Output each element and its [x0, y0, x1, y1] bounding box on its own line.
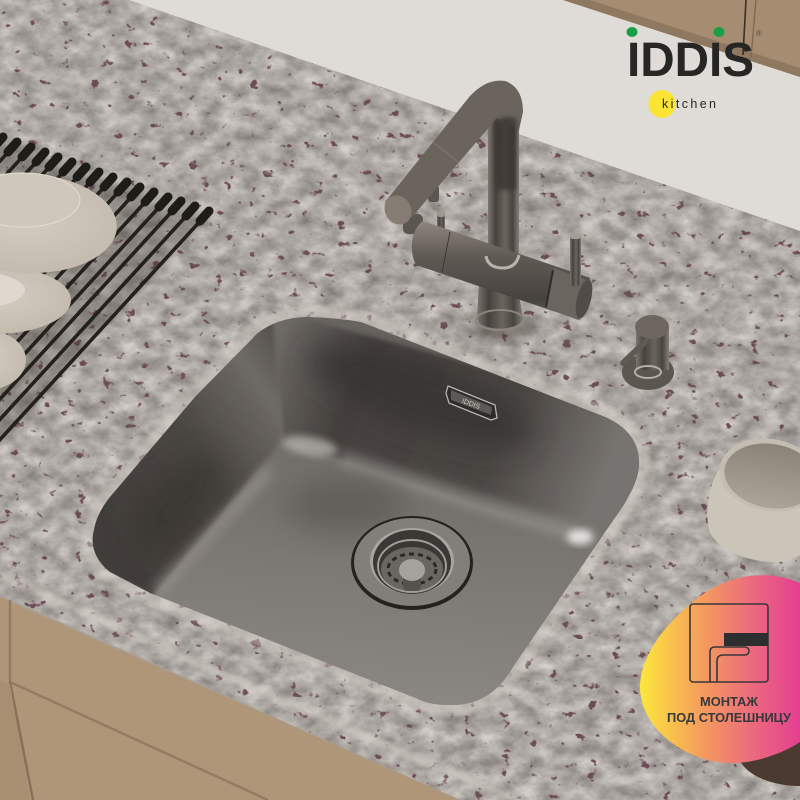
stacked plates	[0, 168, 119, 391]
floor highlights	[340, 458, 590, 538]
horizontal body	[412, 221, 590, 320]
faucet base	[477, 283, 523, 328]
top plate	[0, 168, 119, 278]
logo wordmark: IDDIS	[627, 34, 754, 87]
wall	[0, 0, 800, 240]
soap dispenser	[622, 315, 674, 390]
sink rim	[83, 306, 649, 715]
overflow plate: IDDIS	[461, 398, 481, 411]
installation badge: ПОД СТОЛЕШНИЦУ	[667, 711, 791, 725]
overflow plate	[446, 386, 497, 420]
wall shading	[302, 332, 536, 452]
vertical riser	[488, 118, 519, 268]
gradient blob	[640, 575, 800, 763]
kitchen label: kitchen	[662, 97, 718, 111]
spout	[385, 81, 523, 217]
spray head tail	[403, 214, 423, 234]
right lever	[570, 233, 581, 286]
installation badge	[640, 575, 800, 763]
counter front edge highlight	[0, 574, 520, 800]
IDDIS kitchen logo	[626, 27, 762, 118]
ceramic bowl	[707, 431, 800, 562]
left lever	[437, 211, 445, 239]
lower wood cabinet	[0, 597, 460, 800]
left wall	[92, 324, 280, 595]
faucet	[379, 81, 596, 340]
registered mark: ®	[756, 29, 762, 38]
logo green dots	[626, 27, 724, 37]
right cap	[547, 268, 590, 320]
back wall	[274, 318, 639, 521]
faucet shadow	[460, 320, 540, 340]
dark wood board	[738, 718, 800, 786]
upper wood cabinet	[563, 0, 800, 77]
dish drying rack	[0, 137, 209, 504]
undermount icon	[690, 604, 768, 682]
bottom plate	[0, 329, 26, 391]
sink bowl	[92, 317, 640, 705]
spout end cap	[379, 191, 417, 229]
rack shadow	[0, 140, 203, 452]
riser collar	[486, 255, 519, 268]
yellow spot	[648, 90, 676, 118]
badge caption: МОНТАЖ	[700, 695, 759, 709]
middle plate	[0, 266, 71, 334]
floor of sink	[92, 317, 639, 705]
drain strainer	[351, 516, 473, 610]
